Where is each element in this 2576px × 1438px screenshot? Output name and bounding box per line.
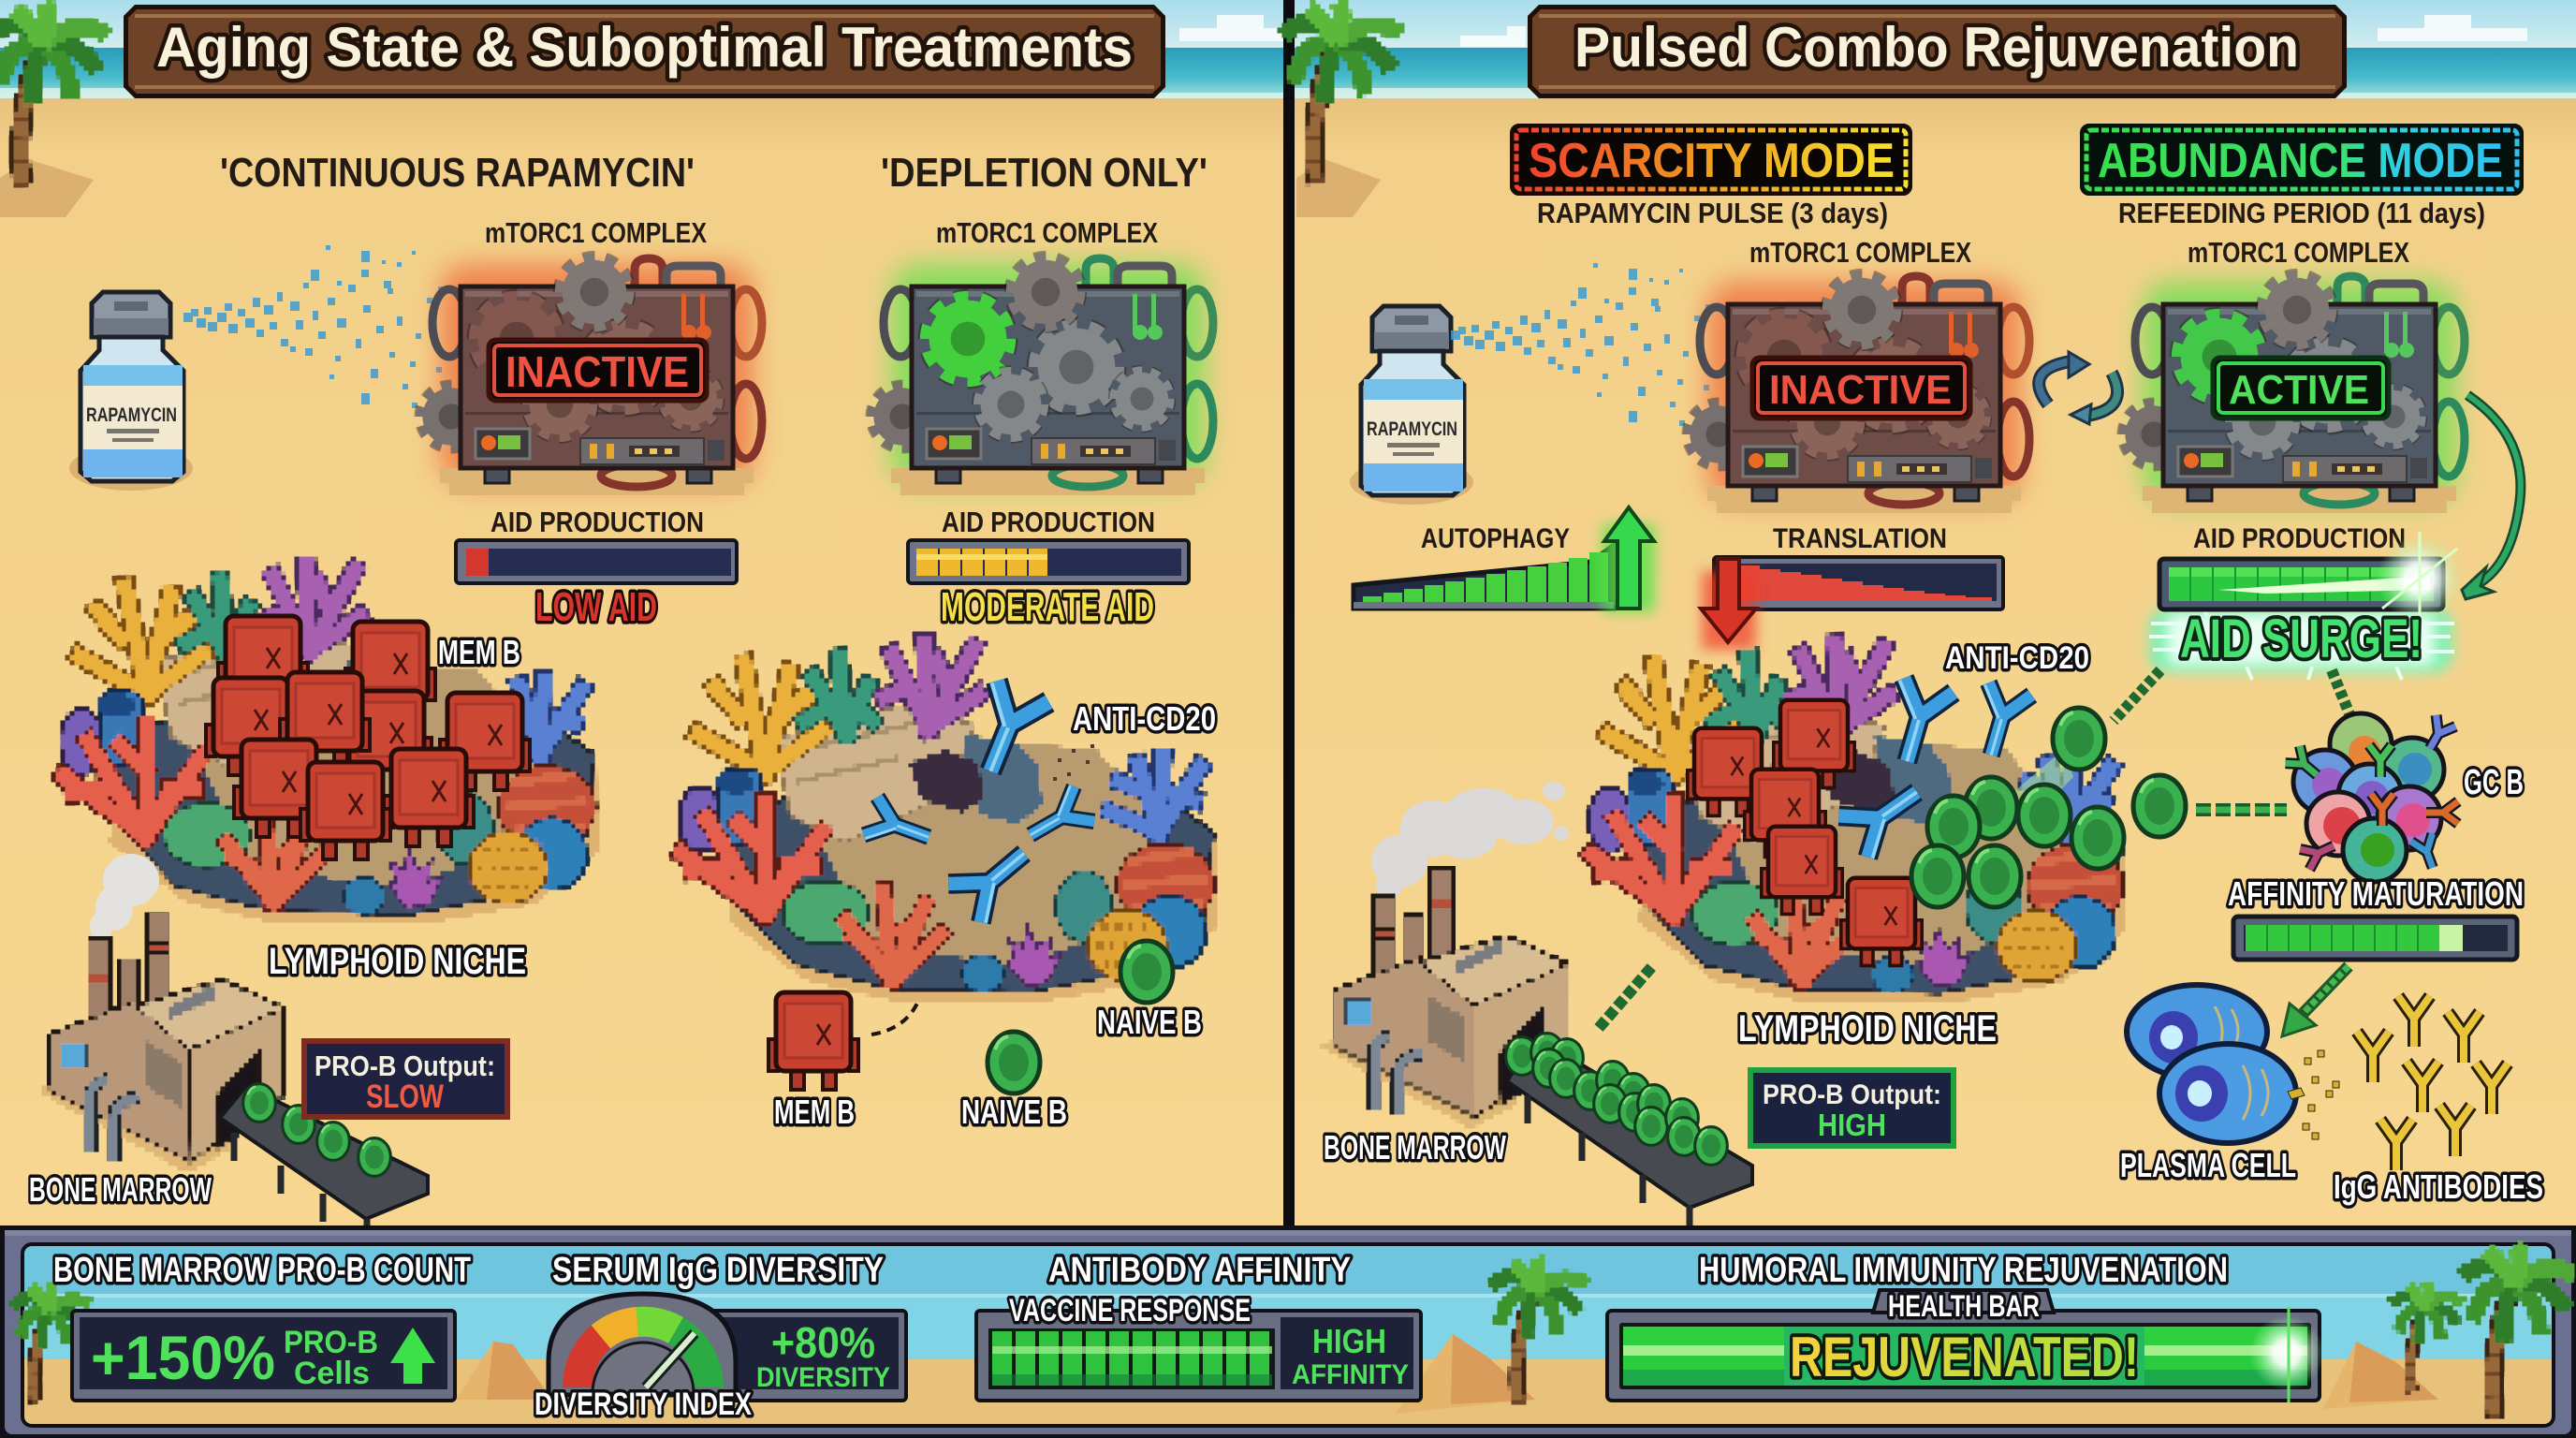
metric: pro-B count: Cells bbox=[294, 1356, 370, 1391]
metric: humoral immunity health bar bbox=[1607, 1251, 2324, 1402]
icon: germinal centre B cell cluster bbox=[2286, 713, 2458, 882]
metric: pro-B count: PRO-B bbox=[284, 1325, 378, 1360]
arrow: surge to naive cells bbox=[2114, 670, 2160, 721]
title banner: right bbox=[1528, 5, 2347, 98]
metric: pro-B count: BONE MARROW PRO-B COUNT bbox=[53, 1251, 471, 1290]
heading: continuous rapamycin: 'CONTINUOUS RAPAMYCIN' bbox=[220, 150, 695, 196]
machine: inactive mTORC1 continuous: INACTIVE bbox=[505, 347, 689, 396]
icon: anti-CD20 antibodies bbox=[863, 680, 1094, 925]
machine: active mTORC1 abundance bbox=[2125, 276, 2465, 513]
icon: naive B cell bbox=[988, 1032, 1040, 1093]
metric: serum IgG diversity: +80% bbox=[771, 1318, 875, 1367]
bar: affinity maturation bbox=[2233, 917, 2517, 960]
metric: humoral immunity health bar: REJUVENATED! bbox=[1790, 1326, 2139, 1388]
panel: left background beach bbox=[0, 0, 1283, 1226]
divider between panels bbox=[1283, 0, 1295, 1228]
label: moderate AID: MODERATE AID bbox=[941, 584, 1154, 630]
label: bone marrow left: BONE MARROW bbox=[29, 1170, 212, 1209]
icon: memory B cell depleted bbox=[768, 992, 919, 1090]
badge: abundance mode: ABUNDANCE MODE bbox=[2098, 134, 2503, 188]
icon: factory and conveyor right bbox=[1322, 870, 1752, 1234]
callout: pro-B output slow: SLOW bbox=[366, 1078, 444, 1115]
label: AID surge: AID SURGE! bbox=[2180, 609, 2422, 669]
title banner: left: Aging State & Suboptimal Treatments bbox=[156, 16, 1133, 79]
icon: rapamycin bottle left: RAPAMYCIN bbox=[86, 404, 177, 426]
chart: vaccine response segments bbox=[992, 1331, 1269, 1386]
chart: autophagy rising wedge bbox=[1354, 545, 1614, 609]
icon: IgG antibodies bbox=[2357, 996, 2508, 1170]
badge: scarcity mode: SCARCITY MODE bbox=[1529, 134, 1895, 188]
icon: factory and conveyor left bbox=[37, 914, 428, 1247]
arrow: autophagy up bbox=[1603, 507, 1655, 612]
icon: smoke right bbox=[1371, 782, 1569, 900]
icon: dashboard palm 3 bbox=[2392, 1284, 2463, 1392]
metric: antibody affinity: VACCINE RESPONSE bbox=[1009, 1293, 1251, 1328]
label: mTORC1 scarcity: mTORC1 COMPLEX bbox=[1749, 236, 1971, 269]
arrow: maturation to plasma bbox=[2282, 966, 2349, 1036]
metric: humoral immunity health bar: HEALTH BAR bbox=[1888, 1289, 2040, 1323]
coral reef: crowded with memory B cells bbox=[61, 565, 598, 924]
callout: AID surge glow bbox=[2149, 599, 2454, 680]
label: mem B: MEM B bbox=[438, 633, 520, 671]
icon: naive B cell entering germinal centre bbox=[2133, 775, 2287, 837]
callout: pro-B output high: HIGH bbox=[1818, 1108, 1886, 1142]
chart: diversity gauge bbox=[549, 1294, 736, 1395]
label: mTORC1 left: mTORC1 COMPLEX bbox=[485, 216, 707, 249]
label: rapamycin pulse: RAPAMYCIN PULSE (3 days) bbox=[1537, 197, 1888, 229]
icon: rapamycin bottle right: RAPAMYCIN bbox=[1367, 418, 1457, 440]
label: lymphoid niche left: LYMPHOID NICHE bbox=[269, 941, 526, 982]
bar: moderate AID bbox=[908, 540, 1189, 583]
label: bone marrow right: BONE MARROW bbox=[1324, 1128, 1506, 1167]
metric: antibody affinity: HIGH bbox=[1312, 1322, 1386, 1360]
icon: smoke left bbox=[90, 854, 159, 942]
icon: memory B cell cluster bbox=[206, 616, 530, 859]
label: mTORC1 abundance: mTORC1 COMPLEX bbox=[2188, 236, 2409, 269]
panel: right background beach bbox=[1295, 0, 2576, 1226]
label: anti-CD20 left: ANTI-CD20 bbox=[1073, 699, 1216, 738]
label: refeeding period: REFEEDING PERIOD (11 days) bbox=[2118, 197, 2485, 229]
coral reef: pulsed niche bbox=[1589, 644, 2127, 1003]
icon: repopulating naive B cells bbox=[1911, 708, 2124, 907]
icon: rapamycin bottle left bbox=[69, 292, 193, 491]
machine: inactive mTORC1 scarcity: INACTIVE bbox=[1769, 367, 1952, 413]
label: anti-CD20 right: ANTI-CD20 bbox=[1945, 640, 2089, 676]
label: AID production abundance: AID PRODUCTION bbox=[2193, 523, 2406, 554]
label: mTORC1 depletion: mTORC1 COMPLEX bbox=[936, 216, 1158, 249]
icon: plasma cells bbox=[2127, 985, 2339, 1143]
arrow: abundance to AID production bbox=[2462, 395, 2521, 599]
title banner: right: Pulsed Combo Rejuvenation bbox=[1574, 16, 2299, 79]
metric: serum IgG diversity bbox=[534, 1251, 906, 1422]
label: lymphoid niche right: LYMPHOID NICHE bbox=[1738, 1008, 1997, 1049]
panel: results dashboard bbox=[0, 1225, 2576, 1438]
callout: pro-B output high: PRO-B Output: bbox=[1763, 1079, 1941, 1110]
metric: serum IgG diversity: SERUM IgG DIVERSITY bbox=[552, 1251, 884, 1290]
arrow: cycle between modes bbox=[2039, 352, 2117, 424]
icon: dashboard palm 2 bbox=[1492, 1259, 1586, 1404]
icon: dashboard palm 4 bbox=[2463, 1245, 2575, 1417]
metric: pro-B count bbox=[53, 1251, 471, 1401]
label: mem B below: MEM B bbox=[774, 1093, 855, 1131]
arrow: translation down bbox=[1701, 559, 1756, 650]
machine: inactive mTORC1 scarcity bbox=[1690, 276, 2029, 513]
chart: translation falling wedge bbox=[1714, 557, 2003, 609]
label: naive B below: NAIVE B bbox=[961, 1093, 1067, 1131]
metric: humoral immunity health bar: HUMORAL IMMUNITY REJUVENATION bbox=[1699, 1251, 2228, 1290]
icon: rapamycin bottle right bbox=[1350, 306, 1473, 505]
machine: active mTORC1 depletion bbox=[873, 258, 1213, 495]
label: AID production depletion: AID PRODUCTION bbox=[942, 506, 1155, 538]
label: AID production left: AID PRODUCTION bbox=[490, 506, 704, 538]
machine: active mTORC1 abundance: ACTIVE bbox=[2229, 367, 2369, 413]
heading: depletion only: 'DEPLETION ONLY' bbox=[881, 150, 1208, 196]
icon: dashboard palm 1 bbox=[13, 1284, 90, 1402]
machine: inactive mTORC1 continuous bbox=[422, 258, 762, 495]
arrow: surge to GC B cells bbox=[2332, 670, 2352, 721]
coral reef: depleted with anti-CD20 bbox=[680, 643, 1217, 1003]
icon: anti-CD20 antibodies right bbox=[1838, 677, 2032, 860]
metric: serum IgG diversity: DIVERSITY bbox=[756, 1362, 890, 1393]
bar: low AID bbox=[456, 540, 737, 583]
icon: rapamycin spray left bbox=[183, 245, 442, 408]
icon: palm tree left bbox=[0, 4, 107, 217]
arrow: marrow to niche bbox=[1599, 964, 1654, 1028]
metric: serum IgG diversity: DIVERSITY INDEX bbox=[534, 1387, 752, 1422]
title banner: left bbox=[124, 5, 1165, 98]
metric: antibody affinity: ANTIBODY AFFINITY bbox=[1048, 1251, 1351, 1290]
bar: AID surge bbox=[2159, 532, 2463, 625]
callout: pro-B output slow bbox=[304, 1041, 507, 1117]
label: GC B: GC B bbox=[2464, 763, 2524, 802]
label: autophagy: AUTOPHAGY bbox=[1421, 523, 1570, 554]
icon: palm tree right bbox=[1282, 2, 1400, 217]
label: naive B on reef: NAIVE B bbox=[1097, 1003, 1202, 1041]
callout: pro-B output high bbox=[1750, 1070, 1954, 1146]
metric: antibody affinity bbox=[976, 1251, 1421, 1401]
icon: remaining memory B cells bbox=[1688, 700, 1922, 965]
label: low AID: LOW AID bbox=[535, 584, 657, 630]
label: translation: TRANSLATION bbox=[1773, 523, 1947, 554]
metric: antibody affinity: AFFINITY bbox=[1292, 1359, 1409, 1390]
metric: pro-B count: +150% bbox=[91, 1323, 275, 1392]
label: plasma cell: PLASMA CELL bbox=[2120, 1146, 2296, 1184]
icon: rapamycin spray right bbox=[1451, 263, 1709, 426]
callout: pro-B output slow: PRO-B Output: bbox=[315, 1049, 495, 1082]
